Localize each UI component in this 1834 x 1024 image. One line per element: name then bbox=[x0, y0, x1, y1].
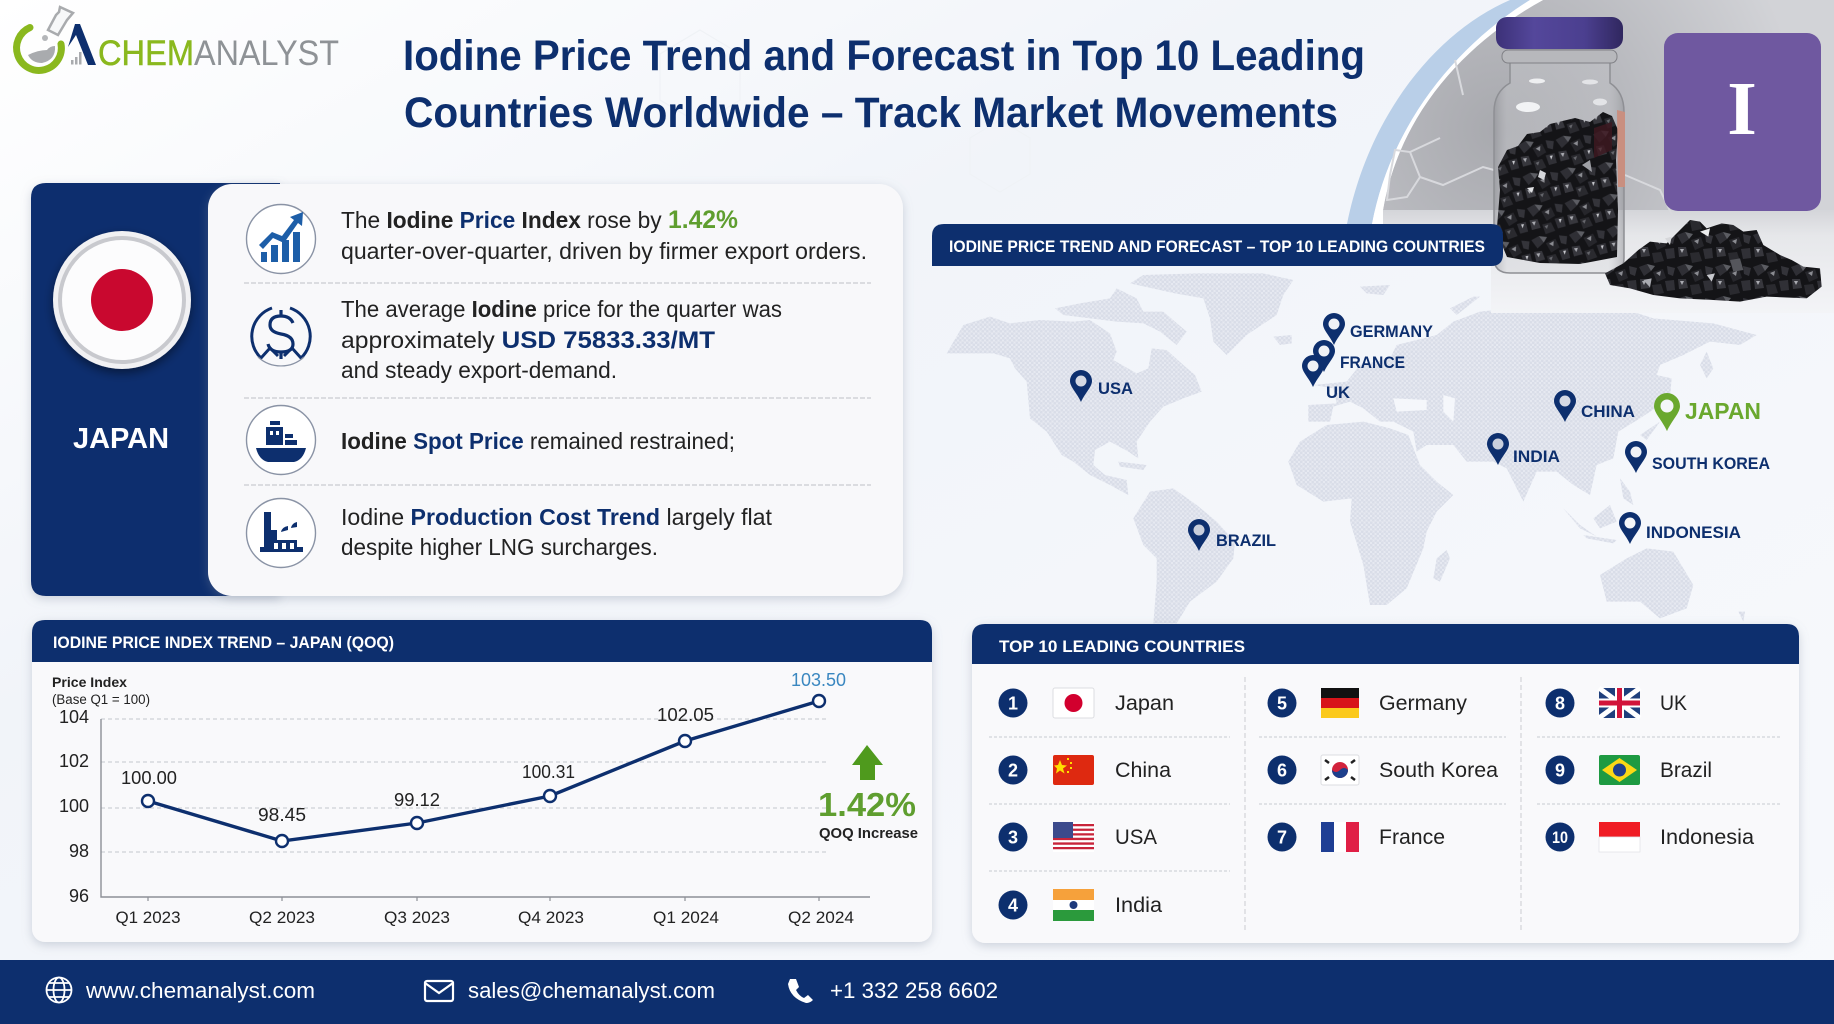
map pins and labels bbox=[1070, 313, 1770, 551]
pin: South Korea bbox=[1625, 441, 1770, 473]
data labels: 99.12 bbox=[394, 790, 440, 810]
x axis labels: Q2 2023 bbox=[249, 908, 315, 927]
map heading banner bbox=[932, 224, 1503, 266]
purple element card bbox=[1664, 33, 1821, 211]
table header: TOP 10 LEADING COUNTRIES bbox=[999, 637, 1245, 656]
row: Germany bbox=[1268, 688, 1467, 718]
text block: spot price: Iodine Spot Price remained restrained; bbox=[341, 428, 735, 454]
chart header bbox=[32, 620, 932, 662]
trend line bbox=[142, 695, 825, 847]
text block: average price: The average Iodine price for the quarter was bbox=[341, 296, 782, 322]
logo: CHEM bbox=[98, 34, 194, 73]
x axis labels: Q1 2024 bbox=[653, 908, 719, 927]
row: USA bbox=[998, 822, 1158, 852]
table header bbox=[972, 624, 1799, 664]
navy country tab bbox=[31, 183, 280, 596]
pin: Indonesia bbox=[1619, 512, 1741, 544]
y axis title bbox=[52, 674, 150, 707]
row: Japan bbox=[998, 688, 1174, 718]
x axis labels bbox=[116, 908, 854, 927]
row: Japan: 1 bbox=[1008, 694, 1018, 714]
title: Iodine Price Trend and Forecast in Top 10 Leading bbox=[403, 32, 1365, 80]
data labels: 100.31 bbox=[522, 762, 575, 782]
website: www.chemanalyst.com bbox=[85, 978, 315, 1003]
y axis labels: 104 bbox=[59, 707, 89, 727]
row: China: 2 bbox=[1008, 760, 1018, 780]
title: Countries Worldwide – Track Market Movements bbox=[404, 89, 1338, 137]
crystal pile bbox=[1605, 220, 1822, 302]
row: France bbox=[1268, 822, 1445, 852]
map: Americas and Greenland bbox=[947, 273, 1293, 623]
footer bbox=[0, 960, 1834, 1024]
row: Germany: 5 bbox=[1277, 694, 1287, 714]
row: Brazil bbox=[1546, 755, 1712, 785]
row: Japan: Japan bbox=[1115, 691, 1174, 715]
text block: average price bbox=[341, 296, 782, 383]
row: UK: UK bbox=[1660, 691, 1688, 715]
row: Germany: Germany bbox=[1379, 691, 1467, 715]
icon: globe bbox=[46, 978, 72, 1002]
row: Indonesia: 10 bbox=[1552, 828, 1568, 847]
callout: QoQ increase: 1.42% bbox=[818, 786, 916, 823]
title bbox=[403, 32, 1365, 137]
y axis title: Price Index bbox=[52, 674, 127, 690]
icon: envelope bbox=[425, 981, 453, 1001]
row: South Korea: 6 bbox=[1277, 760, 1287, 780]
icon: phone bbox=[788, 979, 813, 1003]
text block: production cost: despite higher LNG surcharges. bbox=[341, 534, 658, 560]
row: India: 4 bbox=[1008, 896, 1018, 916]
row: France: 7 bbox=[1277, 828, 1287, 848]
text block: price index: quarter-over-quarter, driven by firmer export orders. bbox=[341, 238, 867, 264]
icon: factory bbox=[246, 498, 316, 568]
Japan flag badge bbox=[53, 231, 191, 369]
logo bbox=[17, 7, 339, 73]
phone number: +1 332 258 6602 bbox=[830, 978, 998, 1003]
x axis labels: Q3 2023 bbox=[384, 908, 450, 927]
row: USA: 3 bbox=[1008, 828, 1018, 848]
pin: China bbox=[1554, 390, 1635, 422]
icon: cargo ship bbox=[246, 406, 316, 474]
country name: JAPAN bbox=[73, 423, 169, 455]
row: Brazil: Brazil bbox=[1660, 758, 1712, 782]
world map bbox=[947, 273, 1757, 623]
callout: QoQ increase: QOQ Increase bbox=[819, 825, 918, 842]
row: China: China bbox=[1115, 758, 1171, 782]
data labels: 102.05 bbox=[657, 705, 714, 725]
icon: dollar cycle bbox=[252, 308, 310, 366]
row: India bbox=[998, 889, 1162, 921]
row: UK bbox=[1546, 688, 1688, 718]
row: China bbox=[998, 755, 1171, 785]
x axis labels: Q4 2023 bbox=[518, 908, 584, 927]
product photo: iodine jar, element card and crystals bbox=[1347, 0, 1834, 313]
molecule lines bbox=[1387, 60, 1672, 215]
purple element card: I bbox=[1727, 67, 1757, 151]
pin: USA: USA bbox=[1098, 379, 1133, 398]
row: India: India bbox=[1115, 893, 1162, 917]
studio background bbox=[1372, 0, 1834, 313]
chart header: IODINE PRICE INDEX TREND – JAPAN (QOQ) bbox=[53, 634, 394, 652]
y axis labels: 98 bbox=[69, 841, 89, 861]
pin: China: CHINA bbox=[1581, 402, 1635, 421]
text block: average price: approximately USD 75833.33/MT bbox=[341, 327, 715, 354]
panel: top 10 leading countries bbox=[972, 624, 1799, 943]
text block: production cost bbox=[341, 504, 773, 560]
y axis labels: 102 bbox=[59, 751, 89, 771]
pin: Japan: JAPAN bbox=[1685, 398, 1761, 424]
pin: South Korea: SOUTH KOREA bbox=[1652, 454, 1770, 473]
pin: Germany bbox=[1323, 313, 1434, 345]
pin: UK: UK bbox=[1326, 383, 1351, 402]
row: Indonesia: Indonesia bbox=[1660, 825, 1754, 849]
data labels bbox=[121, 670, 846, 825]
data labels: 100.00 bbox=[121, 768, 177, 788]
email: sales@chemanalyst.com bbox=[468, 978, 715, 1003]
text block: price index bbox=[341, 206, 867, 264]
arrow: increase bbox=[852, 745, 883, 780]
text block: price index: The Iodine Price Index rose by 1.42% bbox=[341, 206, 738, 234]
row: South Korea: South Korea bbox=[1379, 758, 1498, 782]
row: Indonesia bbox=[1546, 822, 1754, 852]
pin: Brazil: BRAZIL bbox=[1216, 531, 1276, 550]
text block: production cost: Iodine Production Cost Trend largely flat bbox=[341, 504, 773, 530]
pin: Indonesia: INDONESIA bbox=[1646, 523, 1741, 542]
y axis labels bbox=[59, 707, 89, 906]
map heading banner: IODINE PRICE TREND AND FORECAST – TOP 10 LEADING COUNTRIES bbox=[949, 237, 1485, 256]
y axis labels: 96 bbox=[69, 886, 89, 906]
y axis labels: 100 bbox=[59, 796, 89, 816]
pin: USA bbox=[1070, 370, 1133, 402]
panel: Japan summary bbox=[31, 183, 903, 596]
arc backdrop bbox=[1347, 0, 1530, 224]
panel: price index line chart bbox=[32, 620, 932, 942]
pin: Brazil bbox=[1188, 519, 1276, 551]
pin: France bbox=[1313, 340, 1405, 372]
icon: rising chart bbox=[246, 204, 316, 274]
pin: India: INDIA bbox=[1513, 447, 1560, 466]
map: Europe, Africa, Asia, Australia bbox=[1288, 285, 1757, 622]
callout: QoQ increase bbox=[818, 786, 918, 842]
row: South Korea bbox=[1268, 755, 1498, 785]
x axis labels: Q2 2024 bbox=[788, 908, 854, 927]
data labels: 103.50 bbox=[791, 670, 846, 690]
row: USA: USA bbox=[1115, 825, 1158, 849]
white content card bbox=[208, 184, 903, 596]
pin: Germany: GERMANY bbox=[1350, 322, 1434, 341]
pin: France: FRANCE bbox=[1340, 353, 1405, 372]
row: Brazil: 9 bbox=[1555, 760, 1565, 780]
data labels: 98.45 bbox=[258, 805, 306, 825]
pin: Japan bbox=[1654, 393, 1761, 431]
logo: ANALYST bbox=[194, 34, 339, 73]
x axis labels: Q1 2023 bbox=[116, 908, 180, 927]
pin: India bbox=[1487, 433, 1560, 466]
y axis title: (Base Q1 = 100) bbox=[52, 692, 150, 707]
pin: UK bbox=[1302, 355, 1351, 402]
text block: average price: and steady export-demand. bbox=[341, 357, 617, 383]
row: France: France bbox=[1379, 825, 1445, 849]
row: UK: 8 bbox=[1555, 694, 1565, 714]
glass jar bbox=[1494, 17, 1625, 273]
